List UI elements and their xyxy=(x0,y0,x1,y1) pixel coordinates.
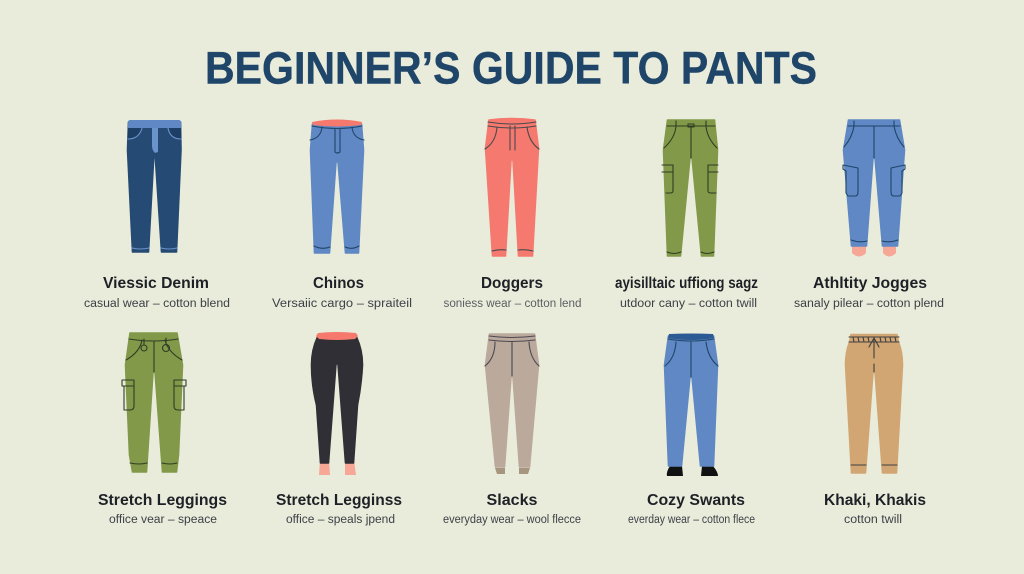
icon: olive cargo joggers xyxy=(122,333,186,472)
name: Viessic Denim xyxy=(103,275,209,292)
icon: olive cargo pants xyxy=(662,120,718,256)
item: Athltity Jogges xyxy=(794,120,944,310)
icon: blue chinos xyxy=(310,120,364,253)
title: BEGINNER’S GUIDE TO PANTS xyxy=(205,42,817,94)
name: Khaki, Khakis xyxy=(824,492,926,509)
name: Doggers xyxy=(481,275,543,292)
name: Cozy Swants xyxy=(647,492,745,509)
description: Versaiic cargo – spraiteil xyxy=(272,298,412,310)
name: ayisilltaic uffiong sagz xyxy=(615,275,758,292)
item: Doggers xyxy=(444,118,582,310)
item: ayisilltaic uffiong sagz xyxy=(615,120,758,310)
description: office – speals jpend xyxy=(286,514,395,526)
icon: coral joggers xyxy=(485,118,539,256)
name: Athltity Jogges xyxy=(813,275,927,292)
item: Cozy Swants xyxy=(628,334,755,526)
description: cotton twill xyxy=(844,514,902,526)
icon: dark denim jeans xyxy=(128,120,181,252)
item: Stretch Legginss xyxy=(276,332,402,526)
icon: black leggings with coral waistband xyxy=(312,332,362,475)
item: Slacks xyxy=(443,334,581,526)
icon: blue cargo joggers with bare ankles xyxy=(843,120,905,256)
item: Viessic Denim xyxy=(84,120,230,310)
name: Slacks xyxy=(486,492,538,509)
name: Stretch Leggings xyxy=(98,492,227,509)
name: Chinos xyxy=(313,275,364,292)
item: Stretch Leggings xyxy=(98,333,227,526)
icon: tan drawstring joggers xyxy=(846,334,902,473)
description: soniess wear – cotton lend xyxy=(444,298,582,310)
description: office vear – speace xyxy=(109,514,217,526)
item: Khaki, Khakis xyxy=(824,334,926,526)
item: Chinos xyxy=(272,120,412,310)
name: Stretch Legginss xyxy=(276,492,402,509)
description: casual wear – cotton blend xyxy=(84,298,230,310)
icon: taupe slacks xyxy=(485,334,539,474)
description: sanaly pilear – cotton plend xyxy=(794,298,944,310)
description: everyday wear – wool flecce xyxy=(443,514,581,526)
icon: blue sweatpants with black shoes xyxy=(664,334,718,476)
description: everday wear – cotton flece xyxy=(628,514,755,526)
description: utdoor cany – cotton twill xyxy=(620,298,757,310)
